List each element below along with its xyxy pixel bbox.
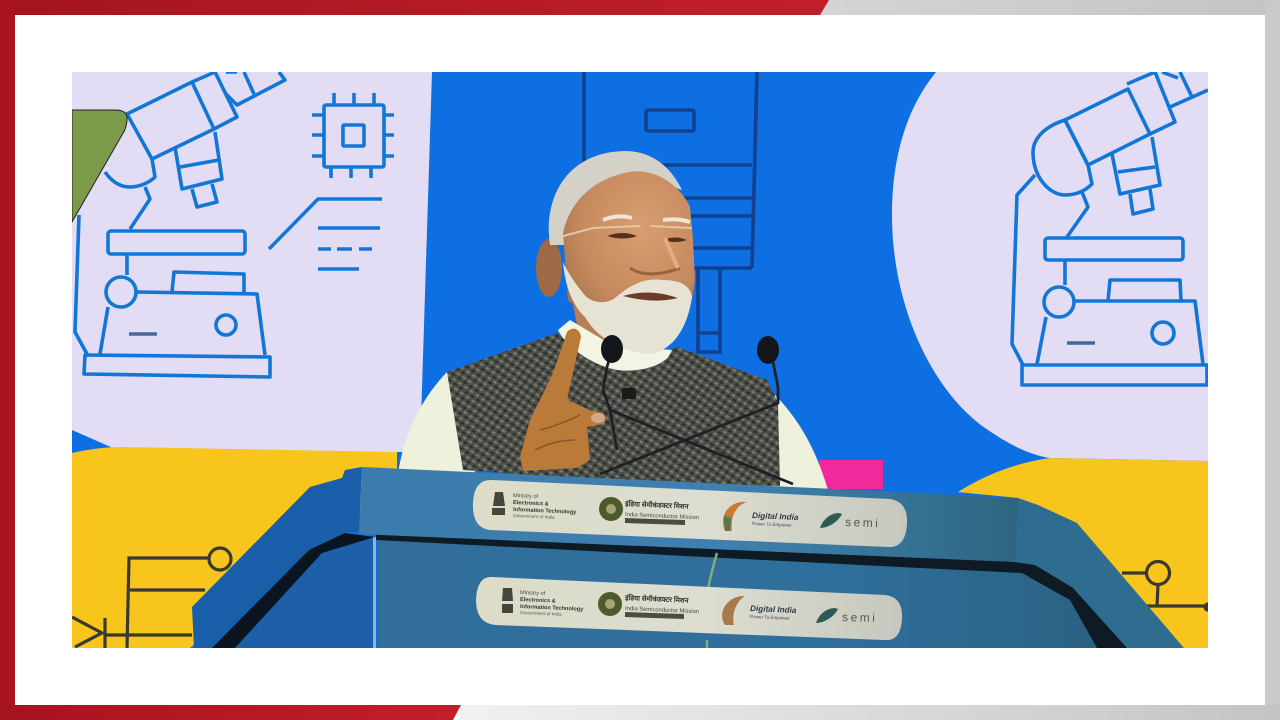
upper sponsor plaque: Power To Empower [752, 521, 792, 528]
icon: circuit line [269, 199, 382, 269]
upper sponsor plaque: Electronics & [513, 500, 549, 508]
mouth [623, 292, 678, 301]
speaker [396, 151, 828, 490]
podium top band [359, 467, 1018, 562]
lower sponsor plaque [476, 577, 902, 640]
nose [630, 268, 680, 274]
podium left wing [192, 467, 362, 648]
lower sponsor plaque: Information Technology [520, 604, 584, 613]
jacket button [622, 388, 636, 399]
upper sponsor plaque [473, 480, 907, 547]
lower sponsor plaque: Electronics & [520, 597, 556, 605]
white beard [563, 262, 692, 354]
emblem [502, 588, 513, 613]
hair [549, 151, 682, 245]
raised hand [520, 329, 606, 471]
glasses [556, 226, 692, 238]
left yellow panel [72, 447, 397, 648]
Digital India logo [723, 502, 747, 531]
microphones [600, 350, 793, 484]
upper sponsor plaque: Information Technology [513, 507, 577, 516]
semi logo [816, 608, 838, 623]
icon: centre microscope outline [584, 72, 757, 352]
upper sponsor plaque: India Semiconductor Mission [625, 512, 699, 521]
podium lower body [377, 536, 1130, 648]
emblem [492, 492, 505, 515]
upper sponsor plaque: Government of India [513, 513, 555, 520]
lower sponsor plaque: Ministry of [520, 590, 546, 597]
upper sponsor plaque: Ministry of [513, 493, 539, 500]
lower sponsor plaque: Digital India [750, 604, 797, 615]
icon: chip [312, 93, 394, 178]
icon: left circuit on yellow [72, 548, 231, 648]
upper sponsor plaque: इंडिया सेमीकंडक्टर मिशन [624, 499, 690, 511]
icon: right circuit on yellow [1122, 562, 1211, 610]
podium lower left panel [235, 537, 375, 648]
upper sponsor plaque: semi [845, 515, 881, 530]
upper sponsor plaque: Digital India [752, 511, 799, 522]
left lavender panel [72, 72, 432, 452]
photo: speaker at semiconductor event [72, 72, 1211, 648]
lower sponsor plaque: semi [842, 610, 878, 625]
green cable [707, 553, 717, 648]
podium shadow right [376, 534, 1127, 648]
semi logo [820, 513, 842, 528]
grey woven jacket [447, 333, 780, 486]
face [563, 171, 695, 308]
podium shadow left [212, 533, 375, 648]
icon: left microscope [75, 72, 285, 377]
ISM logo [599, 497, 623, 521]
neck [572, 304, 605, 340]
ear [536, 239, 562, 297]
white kurta [396, 372, 828, 490]
lower sponsor plaque: India Semiconductor Mission [625, 606, 699, 615]
podium [192, 467, 1184, 648]
lower sponsor plaque: Power To Empower [750, 614, 790, 621]
green shape [72, 110, 127, 222]
right lavender panel [892, 72, 1208, 461]
icon: right microscope [1012, 72, 1208, 385]
lower sponsor plaque: इंडिया सेमीकंडक्टर मिशन [624, 593, 690, 605]
podium right wing [1015, 498, 1184, 648]
eyes [607, 233, 687, 242]
collar [558, 320, 672, 371]
screen backdrop: blue [72, 72, 1208, 648]
ISM logo [598, 592, 622, 616]
pink block [819, 460, 883, 489]
Digital India logo [722, 596, 745, 625]
right yellow panel [958, 458, 1208, 648]
eyebrows [603, 216, 690, 222]
lower sponsor plaque: Government of India [520, 610, 562, 617]
